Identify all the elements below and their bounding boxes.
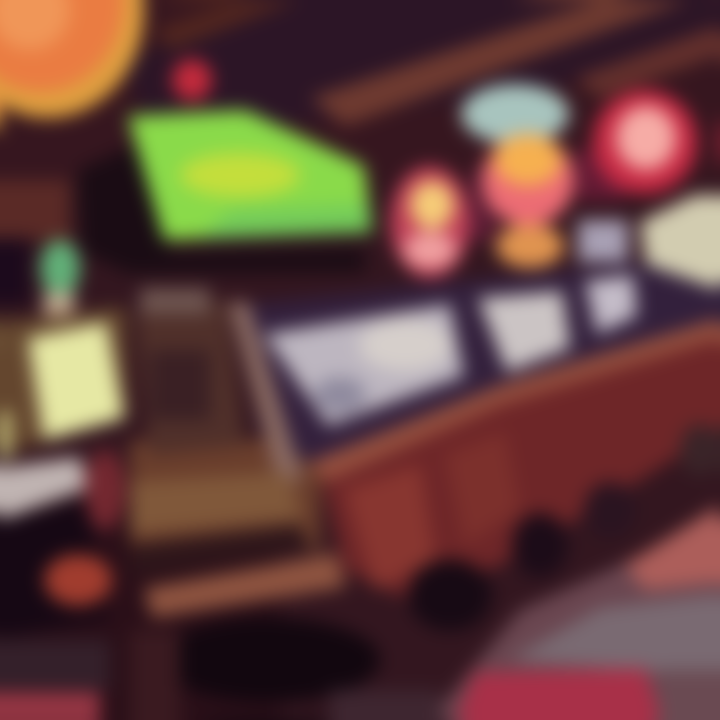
slot machine tops <box>245 262 720 470</box>
panel: teal and orange tall sign <box>461 84 574 268</box>
panel: red round sign <box>593 90 697 194</box>
lower floor and machine bases <box>0 440 720 720</box>
dark gaps beneath counter <box>408 424 720 631</box>
panel: red-brown counter <box>310 318 720 600</box>
dark gap between signs <box>470 150 625 240</box>
panel: orange hanging sign <box>0 0 144 118</box>
panel: slot screen middle <box>478 291 570 372</box>
panel: carpet <box>455 505 720 720</box>
ceiling <box>0 0 720 304</box>
panel: brown central machine <box>135 288 245 455</box>
floor bottom left <box>0 640 440 720</box>
panel: round sign pink <box>390 166 470 278</box>
panel: green screen <box>128 110 372 240</box>
tan side column <box>228 302 302 496</box>
panel: machine shelf bands <box>130 472 346 618</box>
panel: left yellow screen <box>0 307 128 458</box>
panel: white console left <box>0 450 125 638</box>
dark base of machine <box>130 618 380 720</box>
panel: slot screen large <box>264 304 464 426</box>
panel: pale cream box <box>578 195 720 308</box>
green lamp on left machine <box>40 240 80 320</box>
panel: slot screen right <box>585 275 637 334</box>
black cabinet beside screen <box>78 145 365 274</box>
icon: red lamp above screen <box>172 59 212 101</box>
